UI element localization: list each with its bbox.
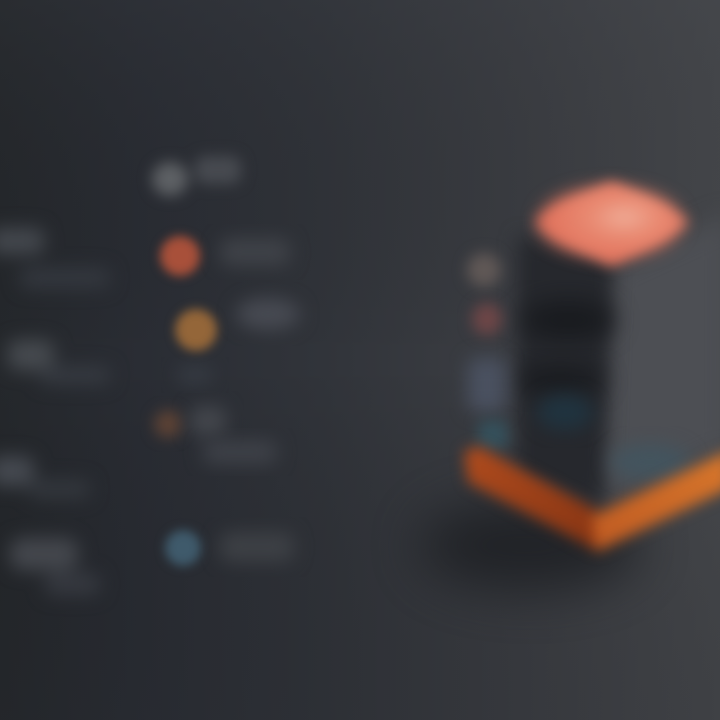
tower dark center [522, 300, 614, 340]
isometric tower [464, 182, 720, 552]
list item 3: dim orange marker and label [154, 406, 277, 464]
tower left panel: teal [478, 420, 508, 450]
tower left panel: tan [467, 253, 501, 287]
list item 1: red marker and label [160, 236, 290, 276]
left column of text placeholders [0, 228, 110, 595]
tower blue panel [537, 394, 593, 430]
tower right face [600, 215, 720, 510]
tower right teal panel [610, 444, 690, 480]
tower left panel: slate [468, 358, 506, 412]
list heading [152, 156, 241, 196]
tower left panel: red [472, 303, 502, 335]
list item 4: blue marker and label [165, 530, 294, 566]
orange base [464, 446, 720, 552]
glowing top [540, 188, 680, 256]
list item 2: orange marker and label [175, 298, 300, 384]
tower left dark face [518, 235, 612, 505]
